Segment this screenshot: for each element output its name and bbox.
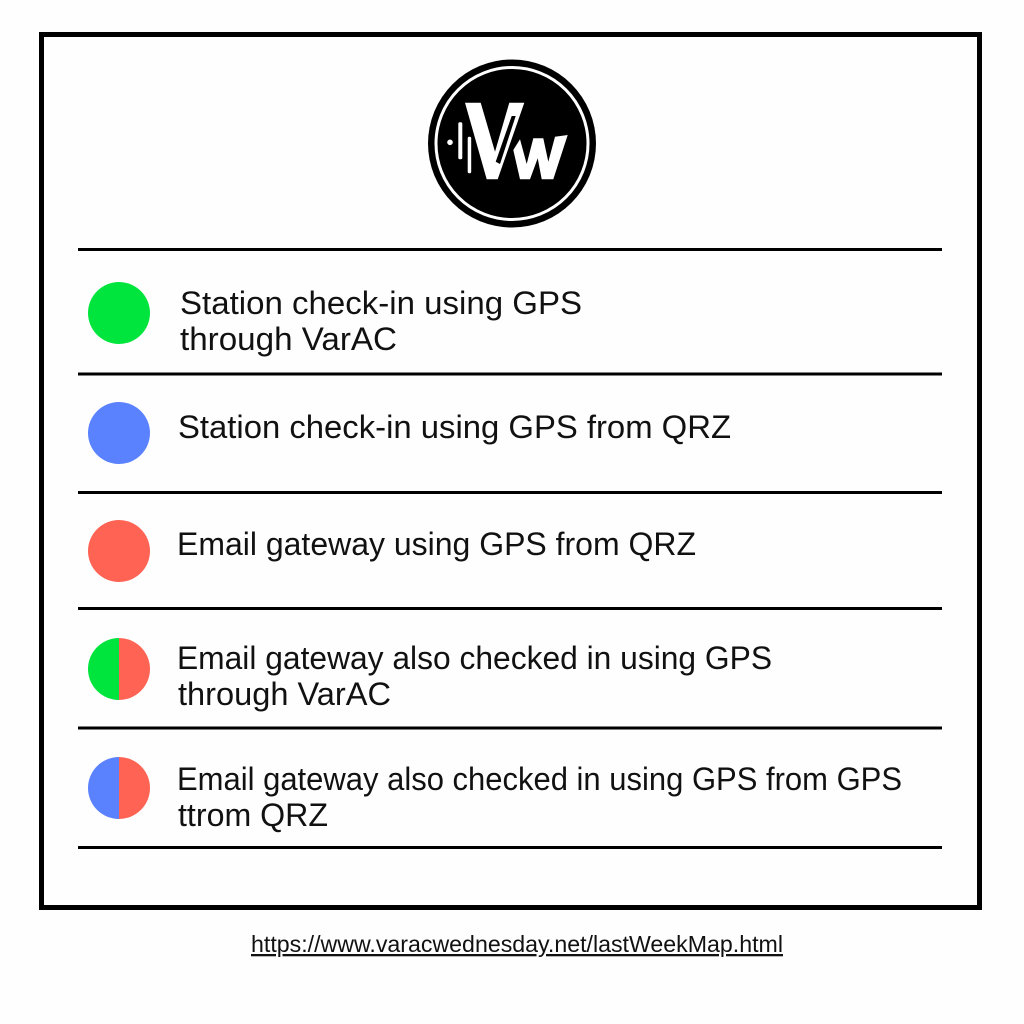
label: station check-in via VarAC: through VarAC — [180, 321, 397, 357]
label: email gateway also from QRZ: Email gateway also checked in using GPS from GPS — [177, 761, 902, 797]
icon: blue and red split dot — [88, 757, 150, 819]
icon: blue dot — [88, 402, 150, 464]
legend panel frame — [42, 34, 980, 908]
icon: green dot — [88, 282, 150, 344]
icon: green and red split dot — [88, 638, 150, 700]
label: station check-in from QRZ: Station check-in using GPS from QRZ — [178, 409, 731, 445]
dividers — [78, 250, 942, 848]
legend row: green and red email gateway — [88, 638, 772, 712]
label: station check-in via VarAC: Station check-in using GPS — [180, 285, 582, 321]
label: email gateway from QRZ: Email gateway using GPS from QRZ — [177, 526, 696, 562]
label: email gateway also from QRZ: ttrom QRZ — [178, 797, 328, 833]
icon: VW logo — [428, 60, 596, 228]
footer URL: https://www.varacwednesday.net/lastWeekMap.html — [251, 931, 783, 957]
legend row: blue and red email gateway — [88, 757, 902, 833]
label: email gateway also via VarAC: Email gateway also checked in using GPS — [177, 640, 772, 676]
label: email gateway also via VarAC: through VarAC — [178, 676, 391, 712]
legend row: red email gateway — [88, 520, 696, 582]
icon: red dot — [88, 520, 150, 582]
legend row: blue station check-in — [88, 402, 731, 464]
legend row: green station check-in — [88, 282, 582, 357]
